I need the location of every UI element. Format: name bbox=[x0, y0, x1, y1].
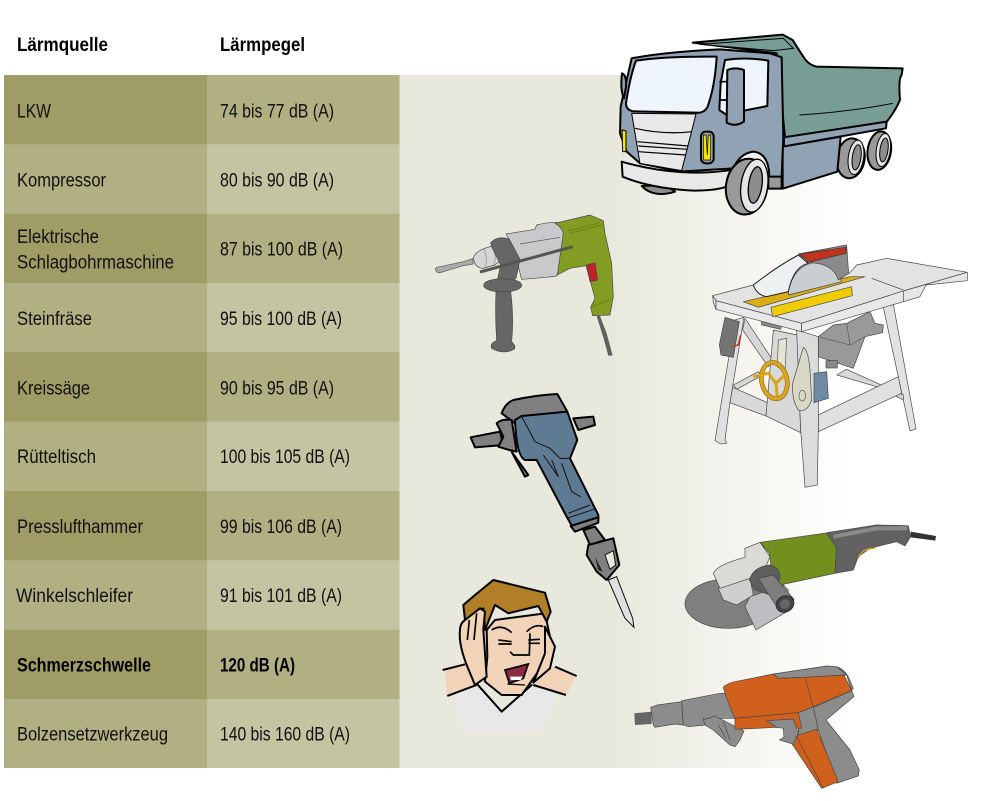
icon: nail gun bbox=[634, 666, 859, 788]
panel: background gradient bbox=[399, 75, 981, 768]
row: Schmerzschwelle: 120 dB (A) bbox=[220, 654, 295, 676]
row: Bolzensetzwerkzeug bbox=[4, 699, 400, 768]
row: Elektrische Schlagbohrmaschine bbox=[4, 214, 400, 283]
icon: dump truck bbox=[620, 35, 903, 217]
icon: hammer drill bbox=[435, 215, 613, 356]
table header: Lärmquelle bbox=[17, 34, 108, 56]
table header bbox=[17, 34, 305, 56]
row: Rütteltisch bbox=[4, 422, 400, 491]
row: Steinfräse: 95 bis 100 dB (A) bbox=[220, 308, 342, 330]
row: Presslufthammer: Presslufthammer bbox=[17, 516, 143, 538]
row: Kompressor bbox=[4, 144, 400, 214]
row: Elektrische Schlagbohrmaschine: Elektrische bbox=[17, 226, 99, 248]
icon: jackhammer bbox=[471, 394, 634, 627]
row: Bolzensetzwerkzeug: Bolzensetzwerkzeug bbox=[17, 724, 168, 746]
row: Elektrische Schlagbohrmaschine: 87 bis 100 dB (A) bbox=[220, 238, 343, 260]
row: Presslufthammer bbox=[4, 491, 400, 560]
row: Kompressor: Kompressor bbox=[17, 170, 106, 192]
icon: angle grinder bbox=[685, 525, 936, 630]
icon: table saw bbox=[713, 245, 967, 487]
row: Elektrische Schlagbohrmaschine: Schlagbohrmaschine bbox=[17, 252, 174, 274]
row: Rütteltisch: 100 bis 105 dB (A) bbox=[220, 446, 350, 468]
row: Schmerzschwelle bbox=[4, 630, 400, 699]
row: Kompressor: 80 bis 90 dB (A) bbox=[220, 170, 334, 192]
icon: man covering ears bbox=[443, 580, 577, 732]
row: Kreissäge: Kreissäge bbox=[17, 378, 90, 400]
row: Steinfräse bbox=[4, 283, 400, 352]
row: LKW: LKW bbox=[17, 100, 51, 122]
row: Kreissäge: 90 bis 95 dB (A) bbox=[220, 378, 334, 400]
row: Winkelschleifer: Winkelschleifer bbox=[16, 585, 133, 607]
row: LKW: 74 bis 77 dB (A) bbox=[220, 100, 334, 122]
row: Winkelschleifer: 91 bis 101 dB (A) bbox=[220, 585, 342, 607]
row: Presslufthammer: 99 bis 106 dB (A) bbox=[220, 516, 342, 538]
row: Steinfräse: Steinfräse bbox=[17, 308, 92, 330]
row: Schmerzschwelle: Schmerzschwelle bbox=[17, 654, 151, 676]
table header: Lärmpegel bbox=[220, 34, 305, 56]
row: Kreissäge bbox=[4, 352, 400, 422]
row: Winkelschleifer bbox=[4, 560, 400, 630]
row: Rütteltisch: Rütteltisch bbox=[17, 446, 96, 468]
table: noise sources and levels bbox=[4, 34, 400, 768]
row: Bolzensetzwerkzeug: 140 bis 160 dB (A) bbox=[220, 724, 350, 746]
row: LKW bbox=[4, 75, 400, 144]
